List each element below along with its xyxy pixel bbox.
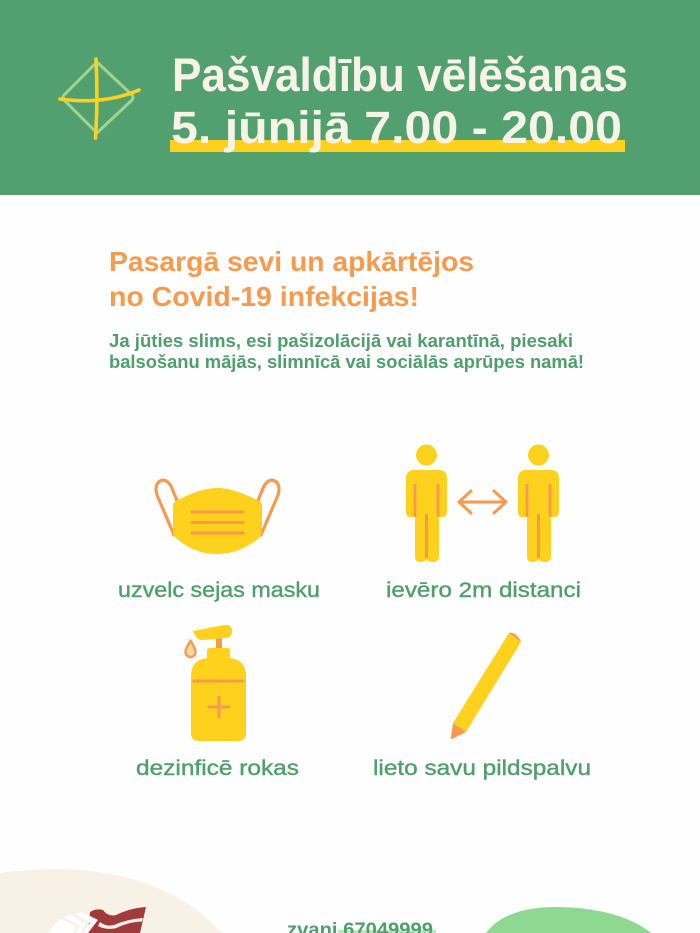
date highlight bar (170, 140, 625, 152)
person left (406, 444, 447, 562)
label: mask: uzvelc sejas masku (118, 578, 320, 602)
arrow: double headed (459, 491, 506, 513)
panel: bottom left cream blob (0, 869, 222, 933)
intro text (109, 331, 584, 372)
icon: ballot cross in diamond (60, 59, 139, 138)
panel: header (0, 0, 700, 195)
heading: no Covid-19 infekcijas! (109, 281, 419, 312)
label: disinfect: dezinficē rokas (136, 756, 299, 780)
icon: sanitizer bottle (186, 625, 246, 741)
title line 1: Pašvaldību vēlēšanas (172, 48, 628, 101)
intro text: balsošanu mājās, slimnīcā vai sociālās aprūpes namā! (109, 352, 584, 372)
person right (518, 444, 559, 562)
title line 2: 5. jūnijā 7.00 - 20.00 (171, 102, 622, 153)
heading: Pasargā sevi un apkārtējos (109, 246, 474, 277)
icon: flag and ballots (48, 907, 146, 933)
icon: face mask (156, 480, 279, 554)
phone highlight (338, 930, 436, 933)
label: distance: ievēro 2m distanci (386, 578, 581, 602)
icon: two people with distance arrow (406, 444, 559, 562)
intro text: Ja jūties slims, esi pašizolācijā vai karantīnā, piesaki (109, 331, 573, 351)
heading (109, 246, 474, 312)
label: own pen: lieto savu pildspalvu (373, 756, 591, 780)
panel: bottom right green blob (486, 907, 651, 933)
icon: pencil (451, 633, 521, 739)
